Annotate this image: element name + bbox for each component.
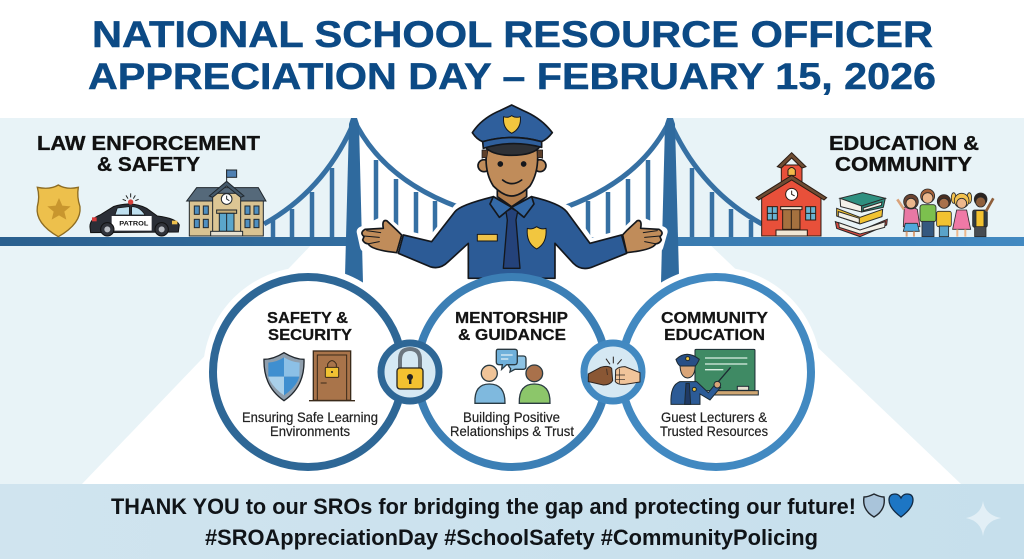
footer thank-you text: THANK YOU to our SROs for bridging the gap and protecting our future! [111, 494, 856, 519]
title: APPRECIATION DAY – FEBRUARY 15, 2026 [88, 56, 936, 97]
background: light side panels [0, 118, 1024, 484]
description: community: Guest Lecturers & [661, 409, 768, 425]
panel: mentorship and guidance: MENTORSHIP [455, 310, 568, 327]
description: mentorship: Relationships & Trust [450, 423, 574, 439]
icon: patrol car [90, 193, 179, 236]
description: mentorship [450, 409, 574, 439]
title [88, 14, 936, 97]
icon group: education icons [756, 153, 993, 237]
officer tie [503, 208, 520, 268]
heading: law enforcement: & SAFETY [97, 154, 201, 176]
panel: safety and security [213, 277, 403, 467]
icon: patrol car: PATROL [119, 221, 148, 228]
icon: padlock connector [381, 343, 439, 401]
officer right hand [623, 220, 662, 253]
icon: small shield [864, 494, 884, 517]
officer left hand [362, 220, 402, 253]
panel: safety and security: SAFETY & [267, 310, 348, 327]
officer nameplate [477, 234, 497, 241]
icon: officer teaching at chalkboard [671, 349, 758, 404]
heading: law enforcement [37, 133, 260, 176]
heading: education and community: COMMUNITY [835, 154, 973, 176]
description: safety [242, 409, 378, 439]
icon: locked door [309, 351, 355, 401]
icon: heart [889, 494, 913, 517]
officer cap [472, 105, 552, 155]
icon group: law enforcement icons [37, 169, 266, 237]
white halo behind circles [203, 267, 821, 477]
title: NATIONAL SCHOOL RESOURCE OFFICER [92, 14, 933, 55]
icon: children group [897, 189, 993, 237]
icon: officer illustration [362, 105, 663, 278]
icon: school building [187, 169, 266, 236]
description: mentorship: Building Positive [463, 409, 560, 425]
officer uniform [398, 197, 627, 278]
description: community [660, 409, 768, 439]
panel: mentorship and guidance [417, 277, 607, 467]
description: safety: Ensuring Safe Learning [242, 409, 378, 425]
panel: community education [621, 277, 811, 467]
right tower [661, 118, 679, 283]
description: safety: Environments [270, 423, 350, 439]
panel: community education: COMMUNITY [661, 310, 768, 327]
icon: stack of books [835, 193, 887, 237]
officer neck and collar [490, 188, 534, 217]
left tower [345, 118, 363, 283]
icon: gold badge [37, 185, 80, 237]
icon: fist bump connector [584, 343, 642, 401]
officer chest badge [527, 227, 546, 249]
description: community: Trusted Resources [660, 423, 768, 439]
panel: safety and security: SECURITY [268, 327, 352, 344]
footer hashtags: #SROAppreciationDay #SchoolSafety #CommunityPolicing [205, 525, 818, 550]
footer band [0, 484, 1024, 559]
panel: mentorship and guidance: & GUIDANCE [458, 327, 566, 344]
heading: education and community: EDUCATION & [829, 133, 979, 155]
panel: community education: EDUCATION [664, 327, 765, 344]
icon: two people talking [475, 349, 550, 403]
icon: red schoolhouse [756, 153, 827, 236]
icon: shield [264, 353, 304, 401]
officer head [478, 150, 546, 196]
bridge deck [0, 237, 1024, 246]
heading: education and community [829, 133, 979, 176]
bridge [0, 118, 1024, 283]
heading: law enforcement: LAW ENFORCEMENT [37, 133, 260, 155]
icon: sparkle [966, 501, 1001, 536]
